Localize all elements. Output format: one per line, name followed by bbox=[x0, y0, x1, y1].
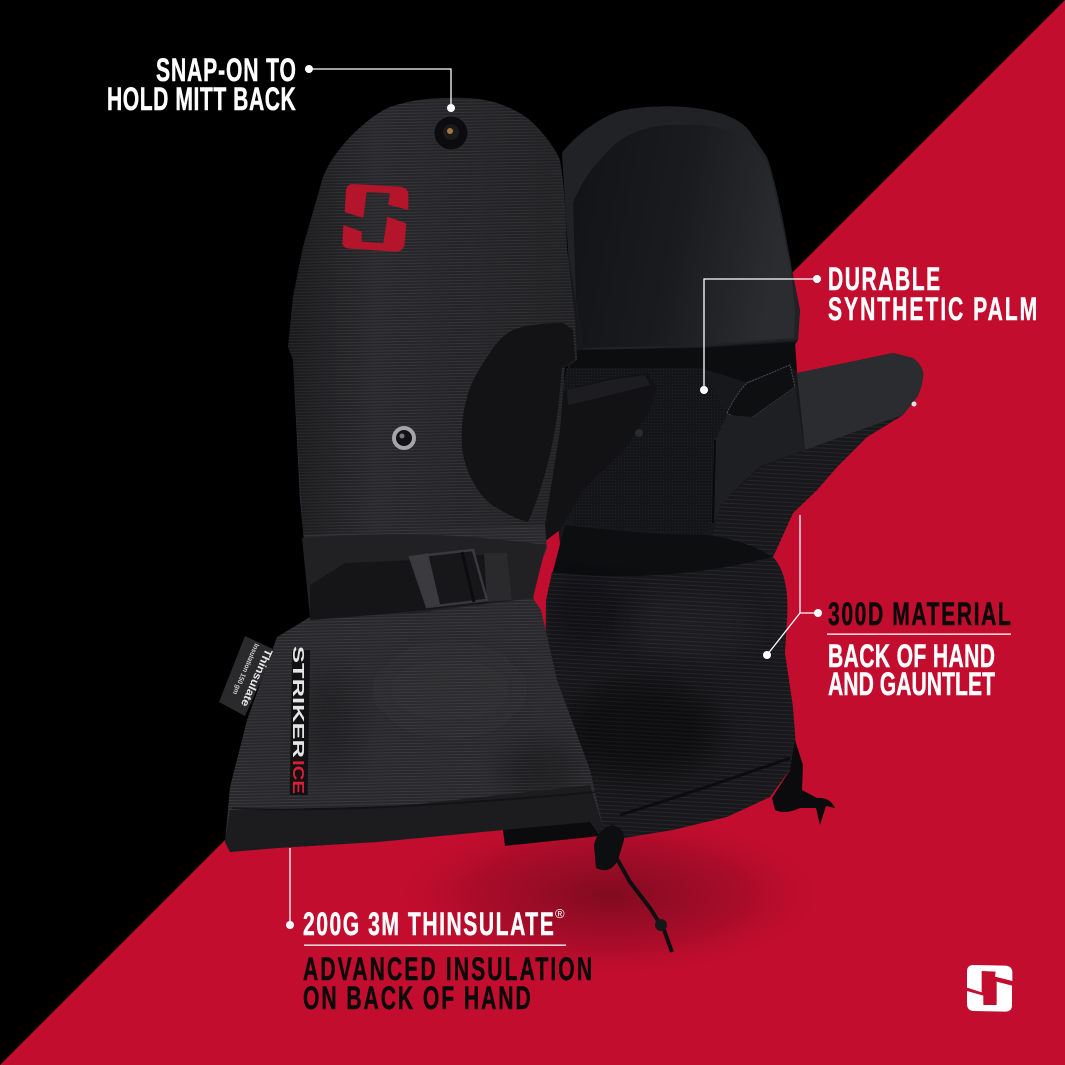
gauntlet folds bbox=[300, 650, 580, 800]
label text: DURABLE bbox=[828, 260, 940, 297]
thumb snap bbox=[912, 402, 916, 406]
leader line bbox=[309, 69, 451, 108]
floor shadow under mitts bbox=[437, 832, 784, 960]
palm bbox=[555, 368, 727, 535]
red S logo on mitt bbox=[342, 184, 408, 252]
divider bbox=[827, 634, 1011, 635]
dark band under flap bbox=[570, 342, 797, 382]
right drawcord lock bbox=[772, 740, 835, 825]
seam bbox=[713, 440, 715, 523]
label text: SNAP-ON TO bbox=[156, 51, 296, 88]
strap end bbox=[484, 553, 512, 602]
flap outer band bbox=[562, 106, 800, 350]
hand silhouette bbox=[225, 98, 603, 852]
red sliver between mitts bbox=[530, 530, 560, 603]
callout: 200g Thinsulate bbox=[286, 848, 592, 1016]
label text: HOLD MITT BACK bbox=[107, 80, 296, 117]
thumb hole bbox=[727, 365, 795, 418]
description bbox=[828, 637, 995, 702]
right mitt: palm side bbox=[545, 106, 923, 842]
leader dots bbox=[763, 609, 822, 659]
Striker Ice label: STRIKER bbox=[289, 646, 306, 759]
lower thumb panel bbox=[713, 415, 903, 557]
Thinsulate tag: Insulation 150 gm bbox=[231, 642, 260, 695]
overall silhouette bbox=[550, 106, 923, 557]
leader dot bbox=[286, 921, 294, 929]
leader line bbox=[767, 515, 818, 655]
leader dots bbox=[305, 65, 455, 112]
callout: durable palm bbox=[700, 260, 1037, 394]
side shading upper bbox=[288, 98, 577, 535]
leader line bbox=[289, 848, 291, 925]
description: AND GAUNTLET bbox=[828, 665, 995, 702]
thumb base bbox=[713, 387, 805, 523]
hem bbox=[225, 785, 603, 852]
brand logo: white S bbox=[967, 965, 1012, 1012]
description: ON BACK OF HAND bbox=[303, 979, 531, 1016]
gauntlet bbox=[545, 557, 797, 842]
description: ADVANCED INSULATION bbox=[303, 950, 592, 987]
leader line bbox=[704, 279, 817, 390]
elastic wrist gather bbox=[552, 525, 773, 579]
description bbox=[303, 950, 592, 1016]
thumb bbox=[797, 353, 923, 450]
left mitt: back side bbox=[219, 98, 603, 852]
label text: SYNTHETIC PALM bbox=[828, 290, 1037, 327]
wrist strap bbox=[310, 553, 512, 620]
callout: 300D material bbox=[763, 515, 1011, 702]
Striker Ice label bbox=[289, 646, 310, 795]
heading: 200G 3M THINSULATE bbox=[303, 905, 554, 942]
leader dots bbox=[700, 275, 821, 394]
left mitt thumb, seen behind bbox=[540, 373, 657, 545]
description: BACK OF HAND bbox=[828, 637, 995, 674]
hem stitch line bbox=[232, 792, 596, 809]
callout: snap-on bbox=[107, 51, 455, 117]
registered mark: ® bbox=[555, 906, 565, 921]
Thinsulate tag bbox=[219, 636, 275, 716]
flap inner lining bbox=[573, 125, 795, 348]
buckle bbox=[410, 550, 487, 607]
gauntlet folds bbox=[545, 570, 790, 815]
grip patch bbox=[462, 323, 575, 522]
wrist gather bbox=[302, 534, 546, 617]
label text bbox=[107, 51, 296, 117]
heading: 300D MATERIAL bbox=[828, 595, 1011, 632]
lower snap bbox=[392, 426, 416, 450]
drawstring toggle and cord bbox=[594, 825, 672, 952]
divider bbox=[304, 944, 566, 946]
top snap bbox=[434, 116, 468, 150]
Striker Ice label: ICE bbox=[289, 760, 306, 794]
Thinsulate tag: Thinsulate bbox=[238, 647, 274, 708]
dark hem flap bbox=[503, 822, 600, 846]
label text bbox=[828, 260, 1037, 327]
